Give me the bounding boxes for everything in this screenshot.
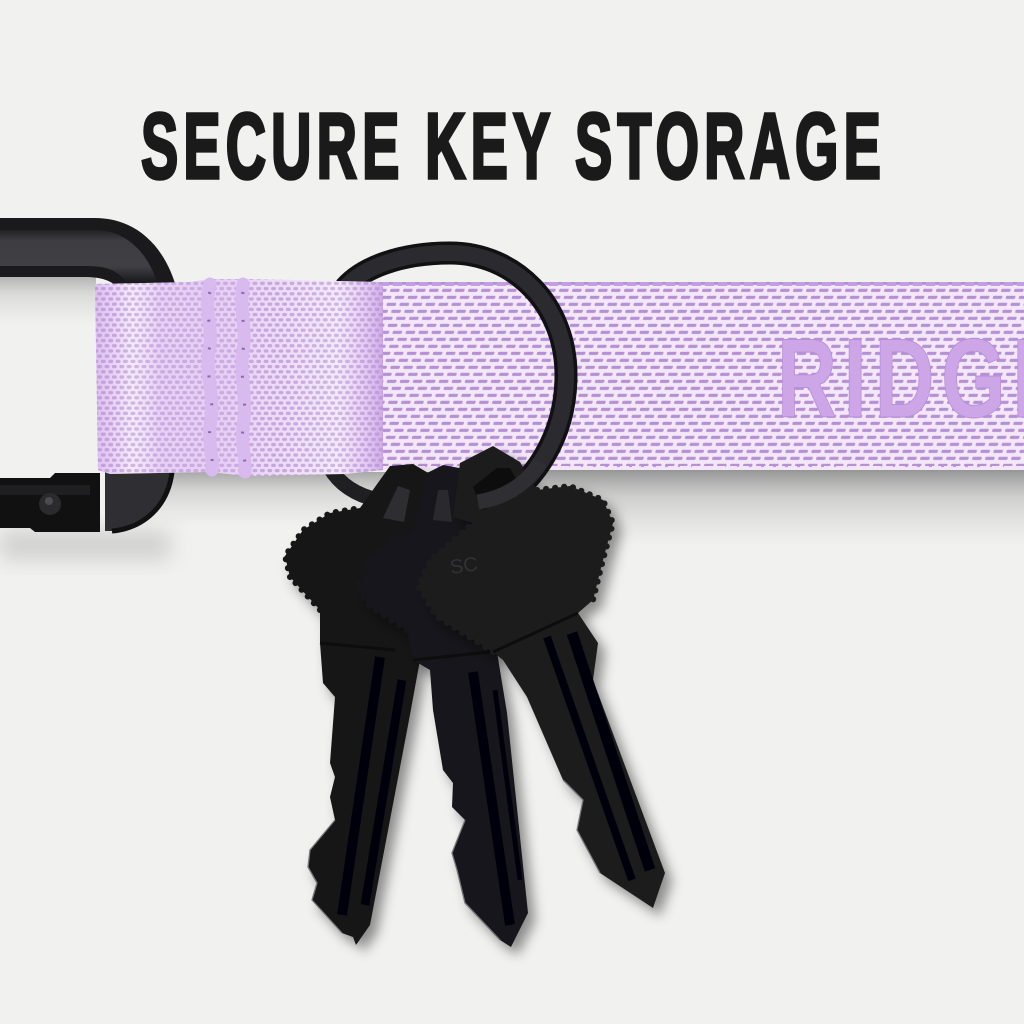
key hole: [473, 468, 522, 510]
folded strap loop: [95, 279, 383, 476]
key 2 middle: [357, 465, 528, 947]
key 3 right: [418, 446, 665, 908]
gate pin: [39, 493, 61, 515]
key 1 hole: [383, 486, 410, 522]
carabiner top bar: [0, 218, 177, 290]
ring through key hole: [478, 462, 540, 502]
stitching right: [242, 284, 245, 472]
key 2 hole: [433, 490, 452, 522]
key brand mark: SC: [449, 553, 479, 579]
keys: [285, 446, 665, 947]
ring lower left: [330, 468, 378, 500]
title: SECURE KEY STORAGE: [141, 96, 881, 199]
carabiner clip: [0, 218, 177, 532]
split ring: [330, 253, 566, 508]
stitching left: [208, 284, 212, 470]
carabiner gate: [0, 473, 100, 532]
key 1 left: [285, 464, 440, 945]
cast shadows: [0, 276, 1024, 560]
webbing strap: [380, 282, 1024, 470]
carabiner lower body: [105, 472, 172, 531]
